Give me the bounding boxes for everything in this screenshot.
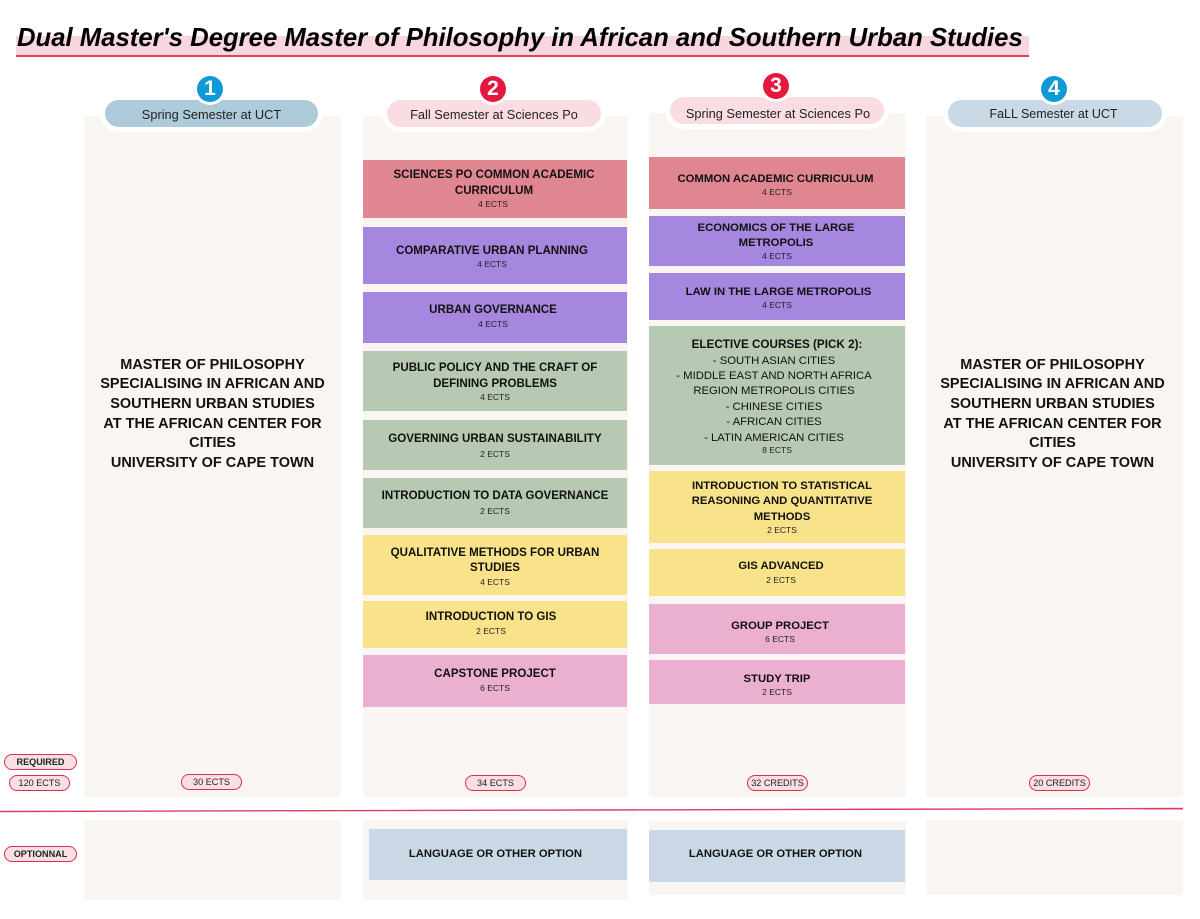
- icon: number 3: [763, 73, 789, 99]
- course: capstone project: CAPSTONE PROJECT: [434, 668, 556, 680]
- header: fall semester at UCT: [948, 100, 1162, 127]
- panel: column 3 background: [649, 113, 906, 797]
- course: elective courses: - SOUTH ASIAN CITIES: [713, 354, 835, 366]
- panel: column 2 background: [363, 116, 628, 797]
- tag: 120 ECTS: 120 ECTS: [19, 778, 60, 788]
- title: [16, 24, 1029, 57]
- icon: number 4: [1041, 76, 1067, 102]
- course: statistical reasoning: REASONING AND QUANTITATIVE: [692, 495, 872, 507]
- course: law in the large metropolis: 4 ECTS: [762, 300, 792, 310]
- panel: column 4 background: [926, 116, 1183, 797]
- tag: 30 ECTS: [181, 774, 242, 790]
- course: introduction to data governance: 2 ECTS: [480, 506, 510, 516]
- text block: column 1 programme: AT THE AFRICAN CENTER FOR: [103, 416, 322, 432]
- course: common academic curriculum: [649, 157, 905, 209]
- course: public policy: DEFINING PROBLEMS: [433, 378, 557, 390]
- title text: Dual Master's Degree Master of Philosophy in African and Southern Urban Studies: [17, 24, 1023, 52]
- course: elective courses: REGION METROPOLIS CITIES: [693, 385, 855, 397]
- course: public policy: PUBLIC POLICY AND THE CRAFT OF: [393, 362, 597, 374]
- tag: 32 credits: [747, 775, 808, 791]
- course: statistical reasoning: [649, 471, 905, 543]
- course: governing urban sustainability: 2 ECTS: [480, 449, 510, 459]
- text block: column 1 programme: SPECIALISING IN AFRICAN AND: [100, 376, 325, 392]
- course: GIS advanced: 2 ECTS: [766, 575, 796, 585]
- course: study trip: [649, 660, 905, 704]
- tag: 30 ECTS: 30 ECTS: [193, 777, 230, 787]
- course: common academic curriculum: 4 ECTS: [762, 187, 792, 197]
- tag: optional: [4, 846, 77, 862]
- course: qualitative methods: [363, 535, 627, 595]
- course: group project: [649, 604, 905, 654]
- course: introduction to data governance: [363, 478, 627, 528]
- course: GIS advanced: GIS ADVANCED: [738, 560, 824, 572]
- course: economics of the large metropolis: 4 ECTS: [762, 251, 792, 261]
- course: Sciences Po common academic curriculum: 4 ECTS: [478, 199, 508, 209]
- tag: 34 ECTS: [465, 775, 526, 791]
- course: introduction to data governance: INTRODUCTION TO DATA GOVERNANCE: [382, 490, 608, 502]
- course: elective courses: - MIDDLE EAST AND NORTH AFRICA: [676, 370, 872, 382]
- course: governing urban sustainability: GOVERNING URBAN SUSTAINABILITY: [388, 433, 602, 445]
- text block: column 1 programme: SOUTHERN URBAN STUDIES: [110, 396, 315, 412]
- text block: column 4 programme: CITIES: [1029, 435, 1076, 451]
- course: governing urban sustainability: [363, 420, 627, 470]
- text block: column 1 programme: [100, 356, 325, 471]
- course: introduction to GIS: 2 ECTS: [476, 626, 506, 636]
- course: study trip: 2 ECTS: [762, 687, 792, 697]
- course: qualitative methods: STUDIES: [470, 562, 520, 574]
- panel: optional column 2: [363, 820, 628, 900]
- divider line: [0, 808, 1183, 812]
- course: elective courses: [649, 326, 905, 465]
- course: public policy: 4 ECTS: [480, 392, 510, 402]
- course: law in the large metropolis: [649, 273, 905, 320]
- header: fall semester at Sciences Po: Fall Semester at Sciences Po: [410, 107, 578, 122]
- course: elective courses: 8 ECTS: [762, 445, 792, 455]
- course: economics of the large metropolis: ECONOMICS OF THE LARGE: [698, 222, 854, 234]
- text block: column 4 programme: [940, 356, 1165, 471]
- panel: optional column 1: [84, 820, 341, 900]
- icon: number 2: [480, 76, 506, 102]
- course: urban governance: 4 ECTS: [478, 319, 508, 329]
- course: elective courses: - LATIN AMERICAN CITIES: [704, 432, 844, 444]
- header: spring semester at Sciences Po: Spring Semester at Sciences Po: [686, 106, 870, 121]
- course: common academic curriculum: COMMON ACADEMIC CURRICULUM: [677, 173, 874, 185]
- tag: 20 credits: [1029, 775, 1090, 791]
- course: urban governance: [363, 292, 627, 343]
- course: economics of the large metropolis: METROPOLIS: [739, 237, 813, 249]
- text block: column 1 programme: UNIVERSITY OF CAPE TOWN: [111, 455, 314, 471]
- tag: required: REQUIRED: [16, 757, 64, 767]
- course: elective courses: - CHINESE CITIES: [726, 401, 822, 413]
- option: language column 2: LANGUAGE OR OTHER OPTION: [409, 848, 582, 860]
- title highlight band: [16, 36, 1029, 57]
- text block: column 4 programme: SOUTHERN URBAN STUDIES: [950, 396, 1155, 412]
- course: comparative urban planning: [363, 227, 627, 284]
- course: capstone project: 6 ECTS: [480, 683, 510, 693]
- tag: 32 credits: 32 CREDITS: [751, 778, 804, 788]
- text block: column 4 programme: MASTER OF PHILOSOPHY: [960, 356, 1145, 372]
- header: fall semester at UCT: FaLL Semester at UCT: [989, 107, 1118, 121]
- option: language column 3: [649, 830, 905, 882]
- tag: 34 ECTS: 34 ECTS: [477, 778, 514, 788]
- panel: column 1 background: [84, 116, 341, 797]
- course: Sciences Po common academic curriculum: SCIENCES PO COMMON ACADEMIC: [393, 169, 594, 181]
- icon: number 2: 2: [487, 77, 499, 100]
- text block: column 4 programme: UNIVERSITY OF CAPE TOWN: [951, 455, 1154, 471]
- course: statistical reasoning: 2 ECTS: [767, 525, 797, 535]
- course: public policy: [363, 351, 627, 411]
- course: capstone project: [363, 655, 627, 707]
- icon: number 1: 1: [204, 77, 216, 100]
- course: elective courses: - AFRICAN CITIES: [726, 416, 822, 428]
- course: study trip: STUDY TRIP: [744, 672, 810, 684]
- icon: number 3: 3: [770, 74, 782, 97]
- course: elective courses: ELECTIVE COURSES (PICK 2):: [692, 338, 862, 350]
- tag: optional: OPTIONNAL: [14, 849, 67, 859]
- tag: required: [4, 754, 77, 770]
- text block: column 1 programme: CITIES: [189, 435, 236, 451]
- option: language column 2: [369, 829, 627, 880]
- course: urban governance: URBAN GOVERNANCE: [429, 304, 557, 316]
- course: GIS advanced: [649, 549, 905, 596]
- option: language column 3: LANGUAGE OR OTHER OPTION: [689, 848, 862, 860]
- header: fall semester at Sciences Po: [387, 100, 601, 127]
- course: Sciences Po common academic curriculum: CURRICULUM: [455, 184, 533, 196]
- course: group project: 6 ECTS: [765, 634, 795, 644]
- course: introduction to GIS: INTRODUCTION TO GIS: [426, 611, 556, 623]
- text block: column 4 programme: SPECIALISING IN AFRICAN AND: [940, 376, 1165, 392]
- course: comparative urban planning: COMPARATIVE URBAN PLANNING: [396, 245, 588, 257]
- text block: column 4 programme: AT THE AFRICAN CENTER FOR: [943, 416, 1162, 432]
- panel: optional column 3: [649, 821, 906, 895]
- course: Sciences Po common academic curriculum: [363, 160, 627, 218]
- course: group project: GROUP PROJECT: [731, 620, 829, 632]
- tag: 120 ECTS: [9, 775, 70, 791]
- course: qualitative methods: 4 ECTS: [480, 577, 510, 587]
- course: statistical reasoning: METHODS: [754, 510, 810, 522]
- header: spring semester at Sciences Po: [670, 97, 884, 124]
- course: statistical reasoning: INTRODUCTION TO STATISTICAL: [692, 480, 872, 492]
- course: introduction to GIS: [363, 601, 627, 648]
- course: economics of the large metropolis: [649, 216, 905, 266]
- header: spring semester at UCT: [105, 100, 318, 127]
- course: comparative urban planning: 4 ECTS: [477, 259, 507, 269]
- course: qualitative methods: QUALITATIVE METHODS FOR URBAN: [391, 546, 599, 558]
- icon: number 1: [197, 76, 223, 102]
- panel: optional column 4: [926, 820, 1183, 895]
- header: spring semester at UCT: Spring Semester at UCT: [142, 107, 281, 122]
- course: law in the large metropolis: LAW IN THE LARGE METROPOLIS: [686, 286, 871, 298]
- tag: 20 credits: 20 CREDITS: [1033, 778, 1086, 788]
- icon: number 4: 4: [1048, 77, 1060, 100]
- text block: column 1 programme: MASTER OF PHILOSOPHY: [120, 356, 305, 372]
